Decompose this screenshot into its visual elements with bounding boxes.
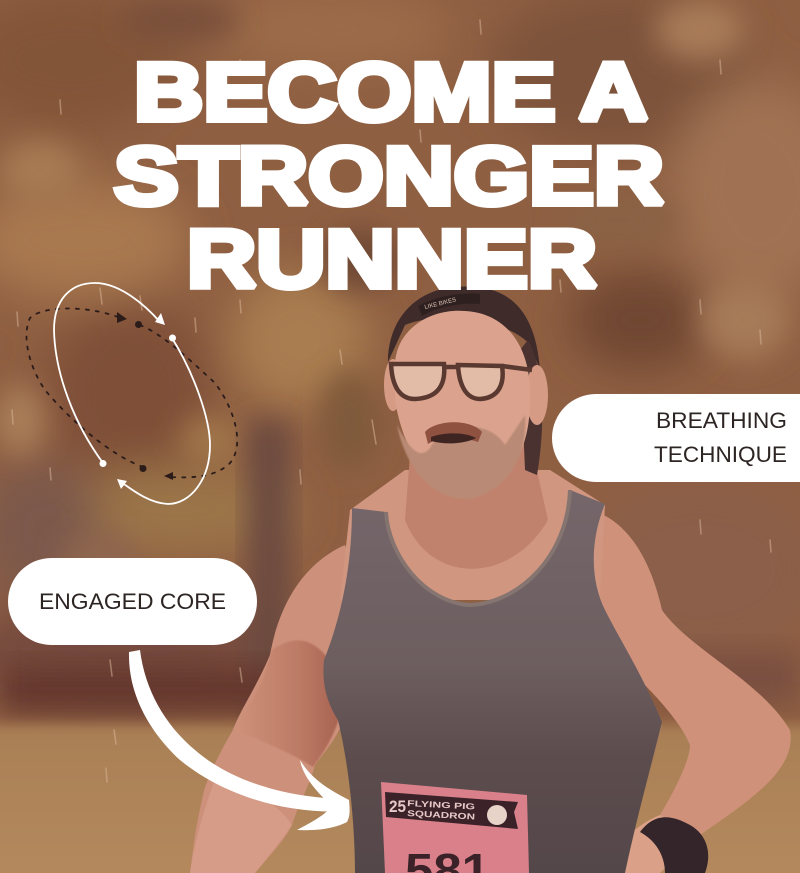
breathing diagram bbox=[26, 283, 237, 504]
runner: beard bbox=[397, 415, 525, 499]
callout: engaged core: ENGAGED CORE bbox=[39, 589, 226, 614]
runner: tank top bbox=[323, 490, 662, 873]
runner: shoulders and chest skin bbox=[340, 470, 605, 600]
race bib: 25 bbox=[389, 797, 406, 816]
title: BECOME A bbox=[134, 47, 648, 138]
callout: breathing technique: TECHNIQUE bbox=[654, 442, 787, 467]
title: RUNNER bbox=[187, 214, 597, 305]
title bbox=[114, 47, 664, 305]
breathing: white inhale loop bbox=[54, 283, 210, 504]
runner: cap back bbox=[388, 287, 540, 370]
bib banner bbox=[385, 792, 518, 829]
race bib: FLYING PIG bbox=[407, 798, 476, 812]
callout: breathing technique: BREATHING bbox=[656, 408, 787, 433]
runner: watch bbox=[640, 817, 708, 873]
breathing: dark dashed exhale loop bbox=[26, 308, 237, 477]
callout: breathing technique bbox=[552, 394, 800, 482]
runner photo: LIKE BIKES bbox=[424, 297, 457, 311]
title: STRONGER bbox=[114, 131, 664, 222]
arrow: engaged core to torso bbox=[129, 650, 350, 830]
runner: left arm bbox=[190, 545, 352, 873]
runner photo bbox=[190, 287, 791, 873]
race bib bbox=[381, 782, 529, 873]
runner: ears bbox=[384, 359, 402, 411]
runner: face bbox=[395, 311, 530, 497]
runner: neck bbox=[405, 440, 548, 569]
runner: glasses bbox=[391, 364, 532, 399]
race bib: SQUADRON bbox=[407, 808, 475, 822]
callout: engaged core bbox=[8, 558, 257, 645]
runner: cap strap bbox=[418, 293, 480, 316]
runner: right arm bbox=[580, 510, 791, 835]
runner: moustache and mouth bbox=[425, 422, 482, 444]
